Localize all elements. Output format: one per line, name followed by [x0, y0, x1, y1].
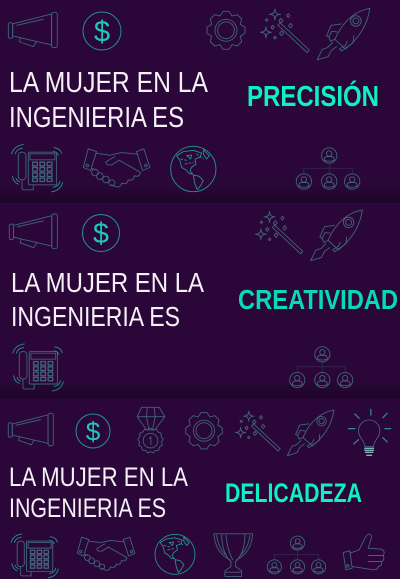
- heading: la mujer en la ingeniería es: INGENIERIA ES: [9, 493, 166, 523]
- icon: magic wand: [260, 9, 309, 53]
- icon: globe: [171, 146, 216, 192]
- icon: rocket: [317, 8, 370, 60]
- icon: megaphone: [9, 214, 57, 249]
- panel: precisión: [0, 0, 400, 203]
- heading: la mujer en la ingeniería es: [9, 462, 188, 523]
- heading: la mujer en la ingeniería es: INGENIERIA ES: [11, 301, 180, 332]
- icon: megaphone: [8, 12, 57, 48]
- icon: rocket: [287, 410, 334, 456]
- icon: light bulb: [349, 409, 391, 455]
- icon: medal: [137, 407, 165, 453]
- icon: globe: [155, 534, 195, 574]
- icon: dollar coin: [76, 414, 110, 448]
- icon: organization chart: [296, 148, 360, 189]
- icon: gear: [186, 412, 222, 449]
- icon: dollar coin: [82, 214, 120, 252]
- icon: rocket: [311, 210, 362, 261]
- panel: creatividad: [0, 203, 400, 398]
- icon: magic wand: [255, 211, 303, 254]
- icon: handshake: [77, 537, 135, 570]
- icon: megaphone: [8, 413, 53, 446]
- heading: la mujer en la ingeniería es: [9, 67, 209, 134]
- heading: la mujer en la ingeniería es: LA MUJER EN LA: [11, 267, 204, 298]
- heading: la mujer en la ingeniería es: LA MUJER EN LA: [9, 462, 188, 492]
- icon: handshake: [83, 149, 150, 187]
- icon: organization chart: [290, 347, 353, 388]
- icon: organization chart: [267, 536, 326, 574]
- icon: gear: [207, 11, 245, 49]
- icon: telephone: [13, 344, 63, 391]
- icon: magic wand: [235, 411, 280, 451]
- icon: trophy: [214, 534, 253, 576]
- highlighted word: delicadeza: DELICADEZA: [225, 478, 362, 508]
- heading: la mujer en la ingeniería es: INGENIERIA ES: [9, 102, 184, 134]
- icon: telephone: [11, 534, 58, 578]
- heading: la mujer en la ingeniería es: LA MUJER EN LA: [9, 67, 209, 99]
- icon: telephone: [12, 145, 63, 192]
- icon: dollar coin: [83, 12, 121, 50]
- heading: la mujer en la ingeniería es: [11, 267, 204, 332]
- icon: thumbs up: [343, 534, 384, 570]
- panel: delicadeza: [0, 398, 400, 579]
